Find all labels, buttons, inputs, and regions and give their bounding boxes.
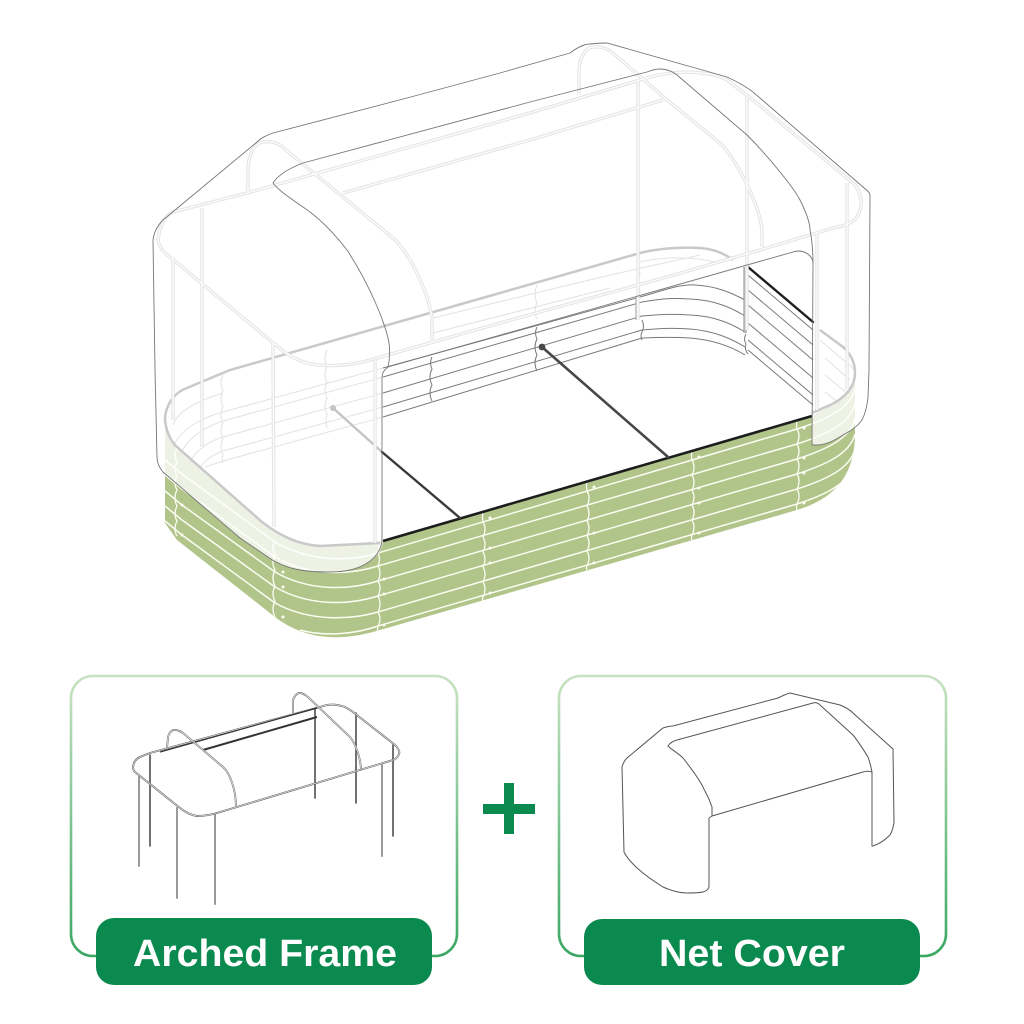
floor front edge line [383, 416, 812, 541]
label pill: Arched Frame [96, 918, 432, 985]
icon: arched frame drawing [133, 693, 399, 904]
panel: net cover [559, 676, 946, 985]
icon: plus sign [483, 783, 535, 834]
bed: green corrugated wall [165, 373, 855, 637]
panel: arched frame [71, 676, 457, 985]
raised garden bed [163, 373, 855, 637]
icon: net cover drawing [622, 693, 894, 893]
label pill: Net Cover: Net Cover [659, 933, 845, 975]
bed: seams and rivets [175, 420, 806, 632]
net cover outline [153, 43, 870, 572]
label pill: Net Cover [584, 919, 920, 985]
rod left (partly behind net) [333, 408, 382, 452]
seam brackets on back wall [637, 267, 745, 333]
bed: net-covered faded band, right [812, 373, 855, 445]
back wall: dark plank lines [383, 275, 813, 417]
arched frame, white pipes [158, 47, 861, 543]
label pill: Arched Frame: Arched Frame [133, 933, 397, 975]
cross rods [330, 267, 813, 518]
bed: plank lines [165, 389, 855, 634]
panel border [71, 676, 457, 956]
panel border [559, 676, 946, 956]
top rim of bed [165, 248, 855, 546]
back wall: faded planks behind net [173, 253, 855, 470]
bed: net-covered faded band, left [163, 418, 383, 572]
